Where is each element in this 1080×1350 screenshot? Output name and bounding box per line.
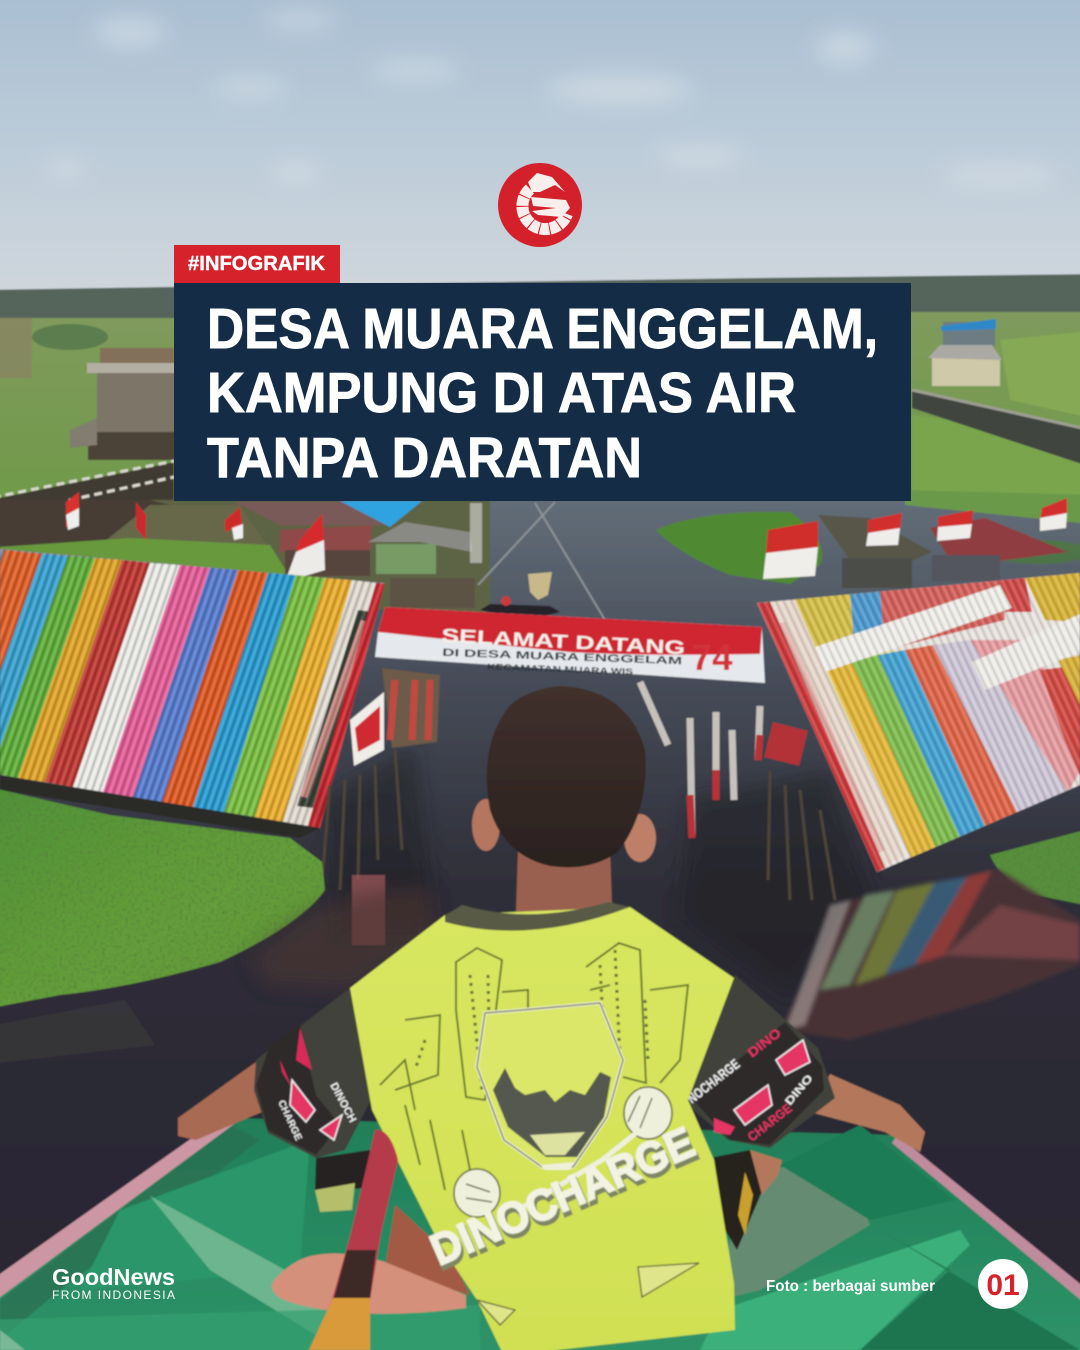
village bank left [0,500,490,615]
treeline horizon [0,274,1080,325]
welcome banner: KECAMATAN MUARA WIS [487,661,634,677]
left colorful roof [0,545,395,835]
brand: GoodNews from Indonesia: FROM INDONESIA [52,1288,175,1302]
boy [178,686,925,1350]
red paddle [309,1130,398,1350]
shirt sleeve right: DINO [783,1072,816,1108]
shirt sleeve left: CHARGE [275,1099,304,1143]
welcome banner [375,607,765,683]
sky with clouds [0,0,1080,290]
welcome banner: 74 [691,637,733,678]
head hair [487,686,646,867]
shirt sleeve right: DINO [745,1025,784,1060]
title line 2: KAMPUNG DI ATAS AIR [207,361,796,425]
shirt sleeve right: CHARGE [745,1100,795,1144]
photo credit: Foto : berbagai sumber [766,1278,935,1295]
page number badge [978,1259,1028,1309]
shirt sleeve left: DINOCH [327,1081,358,1125]
indonesian flags [66,492,1067,582]
shirt print: fists and sword [454,1087,699,1325]
island right [656,490,1080,584]
wooden gate poles and emblem [478,502,605,620]
brand: GoodNews from Indonesia [52,1264,175,1302]
title line 1: DESA MUARA ENGGELAM, [207,297,878,361]
page number badge: 01 [986,1269,1020,1302]
shirt body [350,902,735,1350]
right colorful roof [750,570,1080,880]
houses right [912,319,1080,470]
water [0,500,1080,1350]
grass right [990,826,1080,908]
shirt print: city buildings [380,943,688,1190]
neck [516,850,612,917]
title line 3: TANPA DARATAN [207,426,642,490]
welcome banner: SELAMAT DATANG [441,626,686,659]
brand: GoodNews from Indonesia: GoodNews [52,1264,175,1290]
logo: GNFI red circle emblem [498,163,582,247]
wooden house left [70,348,177,460]
shirt sleeve right [684,975,835,1148]
ears [472,799,656,862]
shirt print: dino head [477,1003,623,1170]
boat gunwale left [0,1114,234,1312]
water reflection of right roof [780,870,1080,1040]
shirt print: DINOCHARGE wordmark: DINOCHARGE [425,1122,704,1279]
collar [445,902,630,931]
shirt sleeve left [254,988,376,1158]
arms [178,1062,925,1152]
grass left foreground [0,785,325,1010]
shirt sleeve right: NOCHARGE [684,1056,743,1106]
boat gunwale right [892,1135,1080,1316]
title panel [174,283,911,501]
fields [0,312,1080,508]
brown water reflection left [250,889,440,990]
legs and feet [272,1150,782,1314]
poles with red and white sticks [640,682,808,838]
shirt print: DINOCHARGE wordmark: DINOCHARGE [423,1118,702,1275]
welcome banner: DI DESA MUARA ENGGELAM [442,647,683,667]
shirt print: building windows [415,950,648,1090]
roof stilts and reflections [0,668,870,1000]
boat [0,1114,1080,1350]
tag: #INFOGRAFIK [174,245,340,283]
stilt houses right [818,515,1068,588]
boardwalk left [0,461,174,550]
grass bank shadow [0,1000,155,1065]
tag: #INFOGRAFIK: #INFOGRAFIK [188,253,326,275]
